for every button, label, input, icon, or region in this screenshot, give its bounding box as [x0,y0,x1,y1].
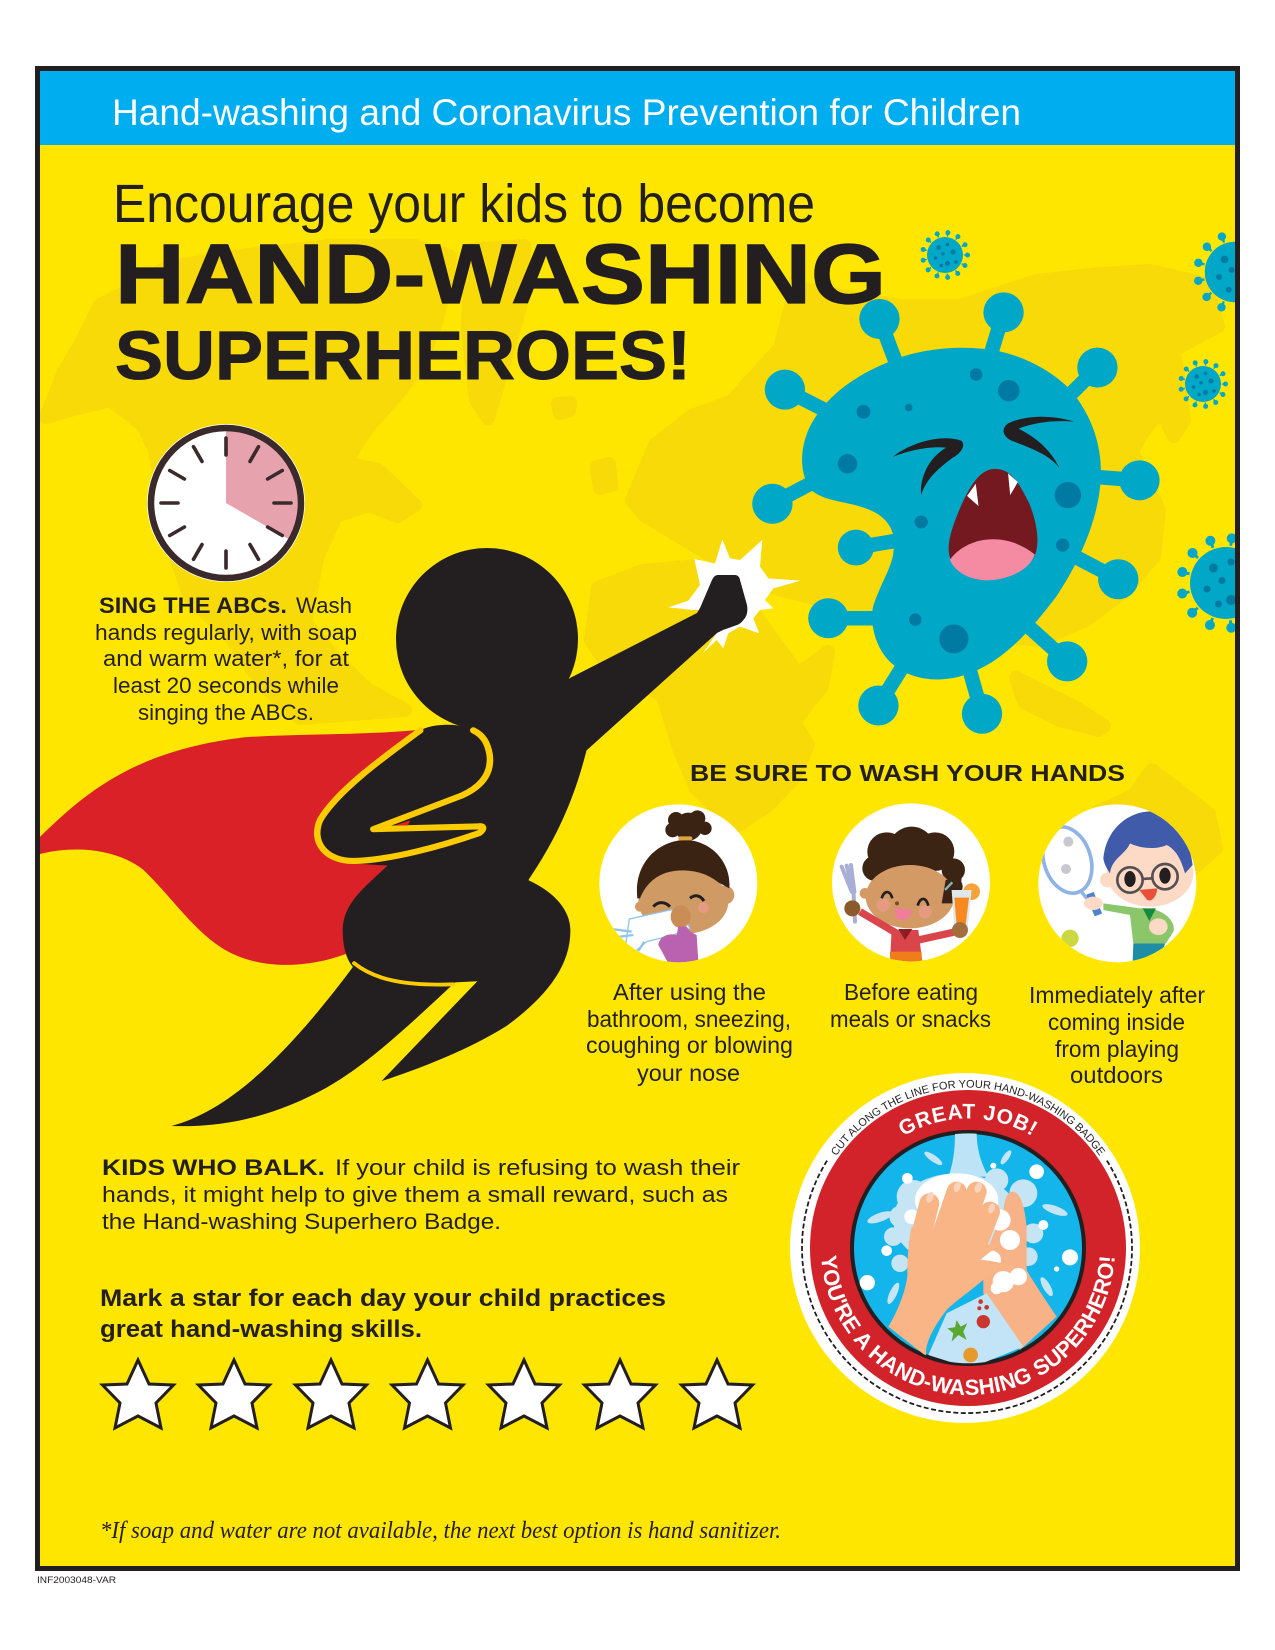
heading: be sure to wash your hands: BE SURE TO WASH YOUR HANDS [690,760,1125,786]
virus spikes [752,292,1160,734]
text block: mark a star: Mark a star for each day your child practices [100,1285,666,1312]
text block: kids who balk: KIDS WHO BALK. [102,1155,325,1180]
virus mouth [949,469,1037,580]
caption: immediately after: coming inside [1048,1009,1185,1035]
text block: kids who balk: If your child is refusing to wash their [335,1155,741,1180]
badge superhero message: YOU'RE A HAND-WASHING SUPERHERO! [822,1254,1115,1396]
superhero figure [40,548,747,1126]
text block: sing the ABCs: hands regularly, with soap [95,620,357,645]
star chart [102,1360,752,1428]
caption: after using the bathroom: coughing or blowing [586,1032,793,1058]
black silhouette [171,548,747,1126]
virus spots [838,368,1081,653]
background world map [46,246,1218,873]
header title: Hand-washing and Coronavirus Prevention for Children [112,92,1021,133]
caption: immediately after: from playing [1055,1036,1179,1062]
caption: after using the bathroom: After using the [613,979,766,1005]
caption: after using the bathroom: bathroom, sneezing, [587,1006,791,1032]
hand-washing superhero badge [790,1073,1140,1423]
caption: after using the bathroom [586,979,793,1086]
heading line: superheroes: SUPERHEROES! [115,317,691,394]
text block: kids who balk: the Hand-washing Superhero Badge. [102,1209,501,1234]
stopwatch clock icon [147,424,305,582]
caption: before eating: meals or snacks [830,1006,991,1032]
text block: mark a star: great hand-washing skills. [100,1316,422,1343]
caption: immediately after: outdoors [1070,1062,1163,1088]
icon: child sneezing [599,804,757,963]
virus eyes [893,417,1074,495]
red cape [40,730,420,965]
text block: sing the ABCs: and warm water*, for at [103,646,349,671]
washing hands illustration [860,1132,1078,1368]
text block: kids who balk [102,1155,741,1234]
icon: child playing tennis [1035,804,1196,962]
main coronavirus character [752,292,1160,734]
text block: sing the ABCs [95,593,357,725]
caption: before eating [830,979,991,1032]
text block: sing the ABCs: Wash [296,593,352,618]
text block: sing the ABCs: SING THE ABCs. [99,593,287,618]
document code: INF2003048-VAR [37,1575,116,1586]
caption: after using the bathroom: your nose [637,1060,740,1086]
icon: child eating [832,803,990,962]
badge cut instruction: CUT ALONG THE LINE FOR YOUR HAND-WASHING BADGE [832,1080,1106,1156]
white impact burst [668,539,801,653]
footnote: *If soap and water are not available, the next best option is hand sanitizer. [100,1518,781,1544]
text block: sing the ABCs: singing the ABCs. [138,700,314,725]
caption: before eating: Before eating [844,979,978,1005]
caption: immediately after [1029,982,1205,1088]
text block: sing the ABCs: least 20 seconds while [113,673,339,698]
caption: immediately after: Immediately after [1029,982,1205,1008]
heading line: hand-washing: HAND-WASHING [115,227,886,321]
front hand [888,1181,1000,1356]
header band [40,71,1235,145]
text block: mark a star [100,1285,666,1343]
virus body [802,348,1101,679]
heading line: encourage your kids: Encourage your kids to become [113,174,815,234]
text block: kids who balk: hands, it might help to give them a small reward, such as [102,1182,728,1207]
badge great job: GREAT JOB! [899,1104,1038,1135]
small virus icons [922,232,1273,628]
gold arm and belt outlines [317,730,490,985]
